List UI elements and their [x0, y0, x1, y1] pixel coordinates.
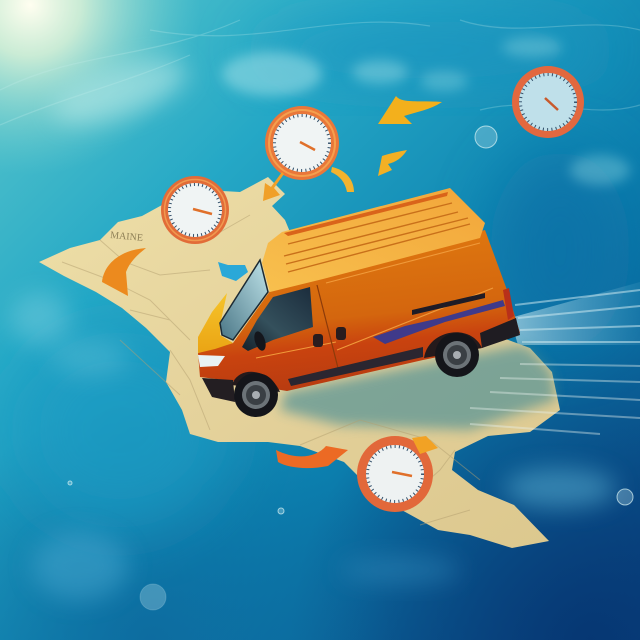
- clock: top centre: [265, 106, 339, 180]
- clock: bottom: [357, 436, 433, 512]
- side panel accent lines: [256, 243, 493, 358]
- front wheel: [234, 373, 278, 417]
- arrow: bottom clock: [412, 436, 438, 454]
- roof top edge: [284, 192, 448, 236]
- arrow: curl near clock: [331, 167, 354, 192]
- map: [39, 177, 640, 548]
- hood: [198, 293, 233, 353]
- rear bumper: [480, 318, 520, 348]
- map water streaks: [470, 364, 640, 434]
- body graphic stripe: [373, 300, 505, 344]
- arrow: small yellow: [378, 150, 407, 176]
- arrow: top right yellow: [378, 96, 442, 124]
- map wet shading under van: [280, 345, 556, 430]
- vent: [412, 293, 485, 315]
- water wake behind van: [510, 282, 640, 345]
- map roads: [62, 215, 480, 525]
- arrow: below top clock: [263, 172, 284, 201]
- blue pin mark: [218, 262, 248, 281]
- front bumper: [202, 378, 235, 402]
- delivery van: [198, 188, 520, 417]
- roof ribs: [284, 203, 470, 272]
- arrow: bottom orange: [276, 446, 348, 468]
- bubbles: [68, 126, 633, 610]
- van body side: [198, 230, 520, 391]
- clock: top right: [512, 66, 584, 138]
- door seam: [317, 285, 338, 368]
- front wheel arch: [232, 372, 280, 392]
- arrow: map left orange: [102, 248, 146, 296]
- clock: left: [161, 176, 229, 244]
- lower trim: [288, 347, 423, 386]
- van roof: [262, 188, 485, 292]
- side window: [242, 287, 313, 351]
- door handles: [313, 327, 346, 347]
- windshield: [220, 260, 268, 340]
- rear wheel: [435, 333, 479, 377]
- headlight: [198, 355, 225, 367]
- mirror: [252, 330, 268, 352]
- map label: MAINE: [110, 230, 143, 244]
- rear light: [503, 288, 514, 320]
- rear wheel arch: [424, 332, 482, 358]
